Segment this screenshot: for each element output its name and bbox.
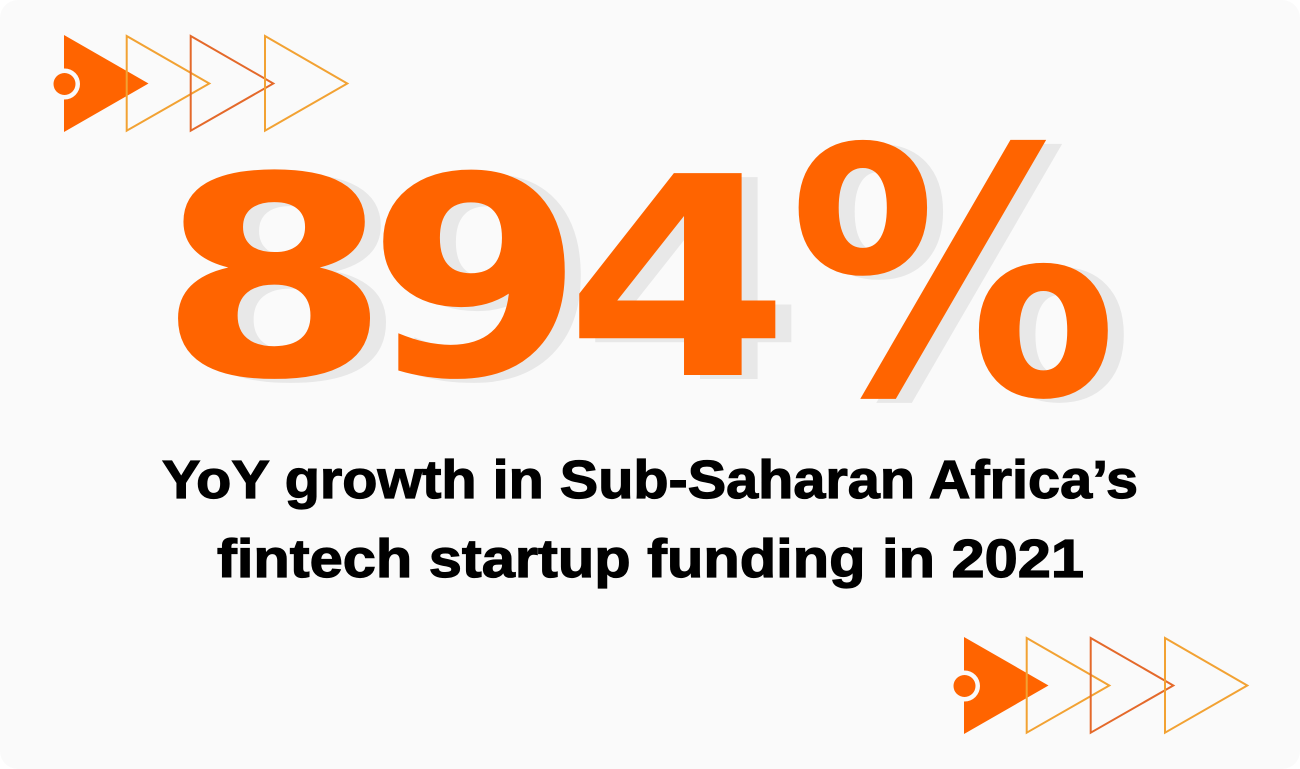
icon: top-left arrow triangles — [49, 35, 347, 132]
number foreground — [158, 77, 1118, 476]
number shadow: 4 — [581, 123, 806, 445]
big number: 894% — [158, 77, 1134, 480]
number foreground: 4 — [565, 119, 790, 441]
number foreground: 9 — [367, 118, 585, 441]
caption — [162, 450, 1138, 589]
number foreground: 8 — [158, 118, 391, 441]
icon: bottom-right arrow triangles — [949, 637, 1247, 734]
number shadow — [174, 81, 1134, 480]
number shadow: % — [804, 81, 1134, 480]
number shadow: 9 — [383, 122, 601, 445]
caption: fintech startup funding in 2021 — [217, 529, 1084, 589]
number shadow: 8 — [174, 122, 407, 445]
caption: YoY growth in Sub-Saharan Africa’s — [162, 450, 1138, 510]
number foreground: % — [788, 77, 1118, 476]
